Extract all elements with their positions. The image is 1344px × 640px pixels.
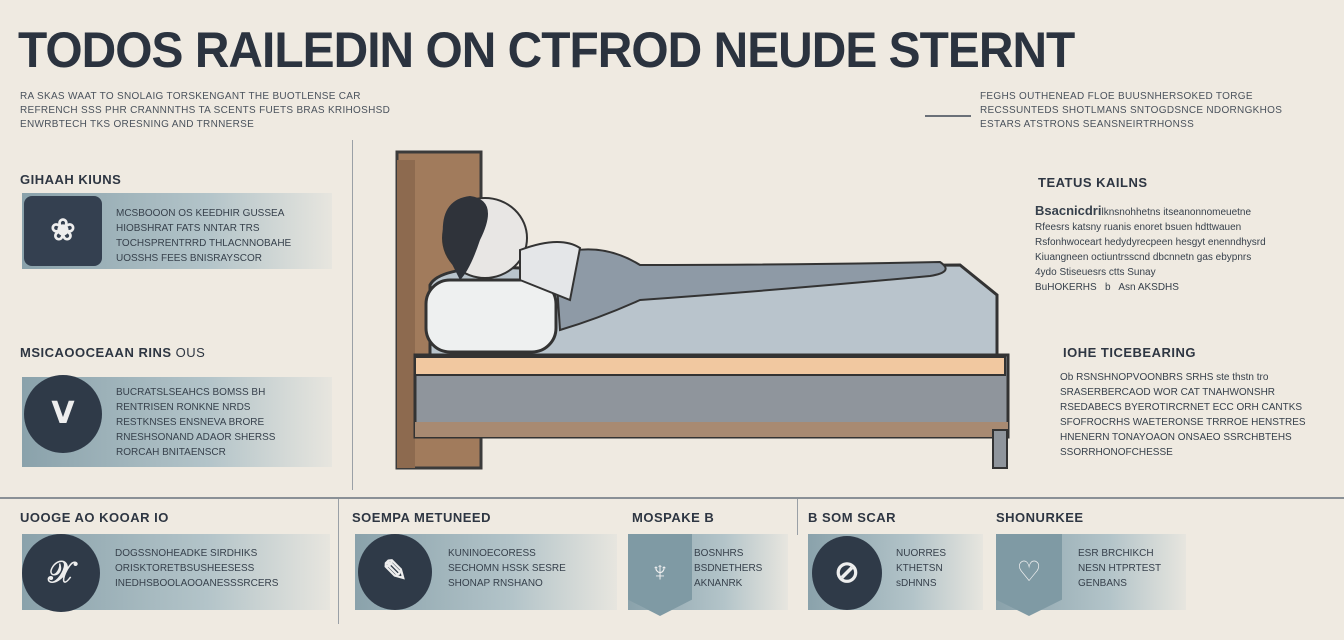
- panel: left top: UOSSHS FEES BNISRAYSCOR: [116, 253, 262, 264]
- panel: left middle: RORCAH BNITAENSCR: [116, 447, 226, 458]
- panel: left middle: RNESHSONAND ADAOR SHERSS: [116, 432, 275, 443]
- intro text left: ENWRBTECH TKS ORESNING AND TRNNERSE: [20, 119, 254, 130]
- panel: right top: Kiuangneen octiuntrsscnd dbcnnetn gas ebypnrs: [1035, 252, 1251, 263]
- panel: bottom 5: ESR BRCHIKCH: [1078, 548, 1154, 559]
- panel: bottom 2: SHONAP RNSHANO: [448, 578, 543, 589]
- panel: right top: BuHOKERHS b Asn AKSDHS: [1035, 282, 1179, 293]
- panel: bottom 5: GENBANS: [1078, 578, 1127, 589]
- panel: bottom 1: [20, 510, 330, 612]
- panel: bottom 3: BSDNETHERS: [694, 563, 762, 574]
- panel: bottom 5: NESN HTPRTEST: [1078, 563, 1161, 574]
- panel: left middle: RESTKNSES ENSNEVA BRORE: [116, 417, 264, 428]
- panel: bottom 3: BOSNHRS: [694, 548, 743, 559]
- heading: GIHAAH KIUNS: [20, 172, 121, 187]
- heading: B SOM SCAR: [808, 510, 896, 525]
- heading: SOEMPA METUNEED: [352, 510, 491, 525]
- panel: bottom 3: AKNANRK: [694, 578, 742, 589]
- panel: right middle: SRASERBERCAOD WOR CAT TNAHWONSHR: [1060, 387, 1275, 398]
- panel: bottom 4: KTHETSN: [896, 563, 943, 574]
- panel: right top: Rsfonhwoceart hedydyrecpeen hesgyt enenndhysrd: [1035, 237, 1266, 248]
- bed frame: [415, 355, 1008, 468]
- panel: bottom 2: KUNINOECORESS: [448, 548, 536, 559]
- icon: ♆: [650, 556, 670, 587]
- panel: left middle: BUCRATSLSEAHCS BOMSS BH: [116, 387, 265, 398]
- person: [443, 196, 580, 300]
- icon: ♡: [1016, 556, 1042, 587]
- icon: [358, 534, 432, 610]
- panel: bottom 1: ORISKTORETBSUSHEESESS: [115, 563, 254, 574]
- intro text right: ESTARS ATSTRONS SEANSNEIRTRHONSS: [980, 119, 1194, 130]
- panel: left top: MCSBOOON OS KEEDHIR GUSSEA: [116, 208, 284, 219]
- panel: right middle: SSORRHONOFCHESSE: [1060, 447, 1173, 458]
- icon: [24, 375, 102, 453]
- icon: [996, 534, 1062, 616]
- panel: right middle: SFOFROCRHS WAETERONSE TRRROE HENSTRES: [1060, 417, 1306, 428]
- panel: bottom 2: [352, 510, 616, 610]
- icon: [812, 536, 882, 610]
- icon: [22, 534, 100, 612]
- panel: bottom 4: [808, 510, 982, 610]
- panel: bottom 3: [628, 510, 788, 616]
- intro text right: [925, 91, 1282, 130]
- panel: bottom 1: INEDHSBOOLAOOANESSSRCERS: [115, 578, 278, 589]
- panel: right top: Bsacnicdrilknsnohhetns itseanonnomeuetne: [1035, 203, 1251, 218]
- panel: bottom 1: DOGSSNOHEADKE SIRDHIKS: [115, 548, 257, 559]
- panel: left top: TOCHSPRENTRRD THLACNNOBAHE: [116, 238, 291, 249]
- panel: right middle: Ob RSNSHNOPVOONBRS SRHS ste thstn tro: [1060, 372, 1268, 383]
- pillow: [426, 280, 556, 352]
- heading: UOOGE AO KOOAR IO: [20, 510, 169, 525]
- intro text right: RECSSUNTEDS SHOTLMANS SNTOGDSNCE NDORNGKHOS: [980, 105, 1282, 116]
- icon: [24, 196, 102, 266]
- mattress / blanket: [430, 249, 997, 355]
- intro text left: REFRENCH SSS PHR CRANNNTHS TA SCENTS FUETS BRAS KRIHOSHSD: [20, 105, 390, 116]
- icon: ⊘: [834, 556, 860, 589]
- panel: bottom 4: NUORRES: [896, 548, 946, 559]
- panel: left middle: [20, 345, 332, 467]
- icon: ❀: [50, 214, 76, 247]
- heading: TEATUS KAILNS: [1038, 175, 1148, 190]
- panel: right middle: HNENERN TONAYOAON ONSAEO SSRCHBTEHS: [1060, 432, 1292, 443]
- heading: MSICAOOCEAAN RINS OUS: [20, 345, 205, 360]
- divider horizontal: [0, 497, 1344, 499]
- panel: bottom 4: sDHNNS: [896, 578, 937, 589]
- headboard: [397, 152, 481, 468]
- bed illustration: [396, 150, 1010, 470]
- panel: bottom 2: SECHOMN HSSK SESRE: [448, 563, 566, 574]
- panel: right top: Rfeesrs katsny ruanis enoret bsuen hdttwauen: [1035, 222, 1241, 233]
- heading: IOHE TICEBEARING: [1063, 345, 1196, 360]
- panel: left top: HIOBSHRAT FATS NNTAR TRS: [116, 223, 260, 234]
- icon: ✎: [382, 555, 408, 588]
- intro text left: [20, 91, 390, 130]
- panel: left middle: RENTRISEN RONKNE NRDS: [116, 402, 250, 413]
- panel: right top: [1035, 175, 1266, 293]
- heading: SHONURKEE: [996, 510, 1084, 525]
- title: TODOS RAILEDIN ON CTFROD NEUDE STERNT: [18, 22, 1074, 78]
- icon: 𝒳: [48, 556, 74, 589]
- panel: right middle: [1060, 345, 1306, 458]
- icon: [628, 534, 692, 616]
- panel: left top: [20, 172, 332, 269]
- intro text right: FEGHS OUTHENEAD FLOE BUUSNHERSOKED TORGE: [980, 91, 1253, 102]
- panel: bottom 5: [996, 510, 1186, 616]
- panel: right top: 4ydo Stiseuesrs ctts Sunay: [1035, 267, 1156, 278]
- panel: right middle: RSEDABECS BYEROTIRCRNET ECC ORH CANTKS: [1060, 402, 1302, 413]
- divider vertical: [352, 140, 353, 490]
- icon: V: [51, 396, 75, 431]
- intro text left: RA SKAS WAAT TO SNOLAIG TORSKENGANT THE BUOTLENSE CAR: [20, 91, 361, 102]
- heading: MOSPAKE B: [632, 510, 714, 525]
